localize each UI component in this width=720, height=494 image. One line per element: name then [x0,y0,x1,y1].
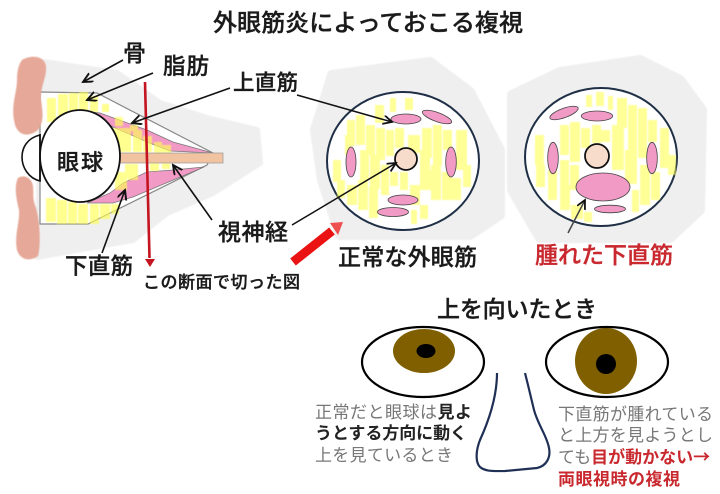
panel: side view of the orbit [13,40,300,292]
fat patches [535,92,676,222]
background: orbit tissue [37,62,260,257]
panel: looking up [315,296,713,489]
muscles [346,107,456,216]
optic nerve section [395,148,417,170]
text: swollen muscle effect: 下直筋が腫れている [558,405,713,424]
lower rectus muscle [87,167,204,203]
text: swollen muscle effect: と上方を見ようとし [558,426,713,445]
red section line [145,82,155,267]
orbit interior [40,92,213,224]
background tissue [512,60,702,238]
arrow: inferior rectus [102,190,125,253]
label: normal muscles: 正常な外眼筋 [338,244,477,270]
bone upper [13,57,46,135]
eyeball [22,110,120,202]
text: swollen muscle effect: 両眼視時の複視 [558,469,680,489]
text: swollen muscle effect: ても目が動かない→ [558,443,710,468]
muscles [548,103,657,213]
orbit circle [327,92,479,230]
red pointer arrow [293,222,343,262]
title: 外眼筋炎によっておこる複視 [213,10,523,37]
orbit circle [525,88,677,226]
text: normal eye movement: 正常だと眼球は見よ [315,403,472,422]
optic nerve [120,153,223,163]
text: normal eye movement: 上を見ているとき [315,446,453,465]
upper rectus muscle [77,110,213,153]
label: section caption: この断面で切った図 [143,273,300,292]
right eye [546,327,668,397]
arrow: superior rectus [297,95,392,122]
arrow: superior rectus, side view [132,88,230,123]
heading: 上を向いたとき [437,296,597,322]
label: fat: 脂肪 [163,54,209,79]
label: eyeball: 眼球 [57,150,103,175]
arrow: fat [87,73,153,100]
label: superior rectus: 上直筋 [233,71,298,95]
text: normal eye movement: うとする方向に動く [315,423,467,443]
nose [477,373,549,471]
panel: normal cross-section [292,62,500,270]
panel: swollen cross-section [512,60,702,268]
text: swollen muscle effect [558,405,713,489]
left eye [362,327,484,397]
fat: yellow patches [46,92,171,224]
arrow: optic nerve [292,163,396,225]
label: optic nerve: 視神経 [218,219,288,245]
arrow: optic nerve, side view [173,165,212,220]
label: bone: 骨 [123,40,146,66]
bone lower [16,176,40,259]
optic nerve section [585,144,609,168]
arrow: swollen muscle [568,200,585,233]
label: inferior rectus: 下直筋 [65,254,133,279]
background tissue [315,62,500,235]
text: normal eye movement [315,403,472,465]
label: swollen muscle: 腫れた下直筋 [535,242,673,268]
fat patches [333,98,471,224]
arrow: bone [83,60,123,82]
